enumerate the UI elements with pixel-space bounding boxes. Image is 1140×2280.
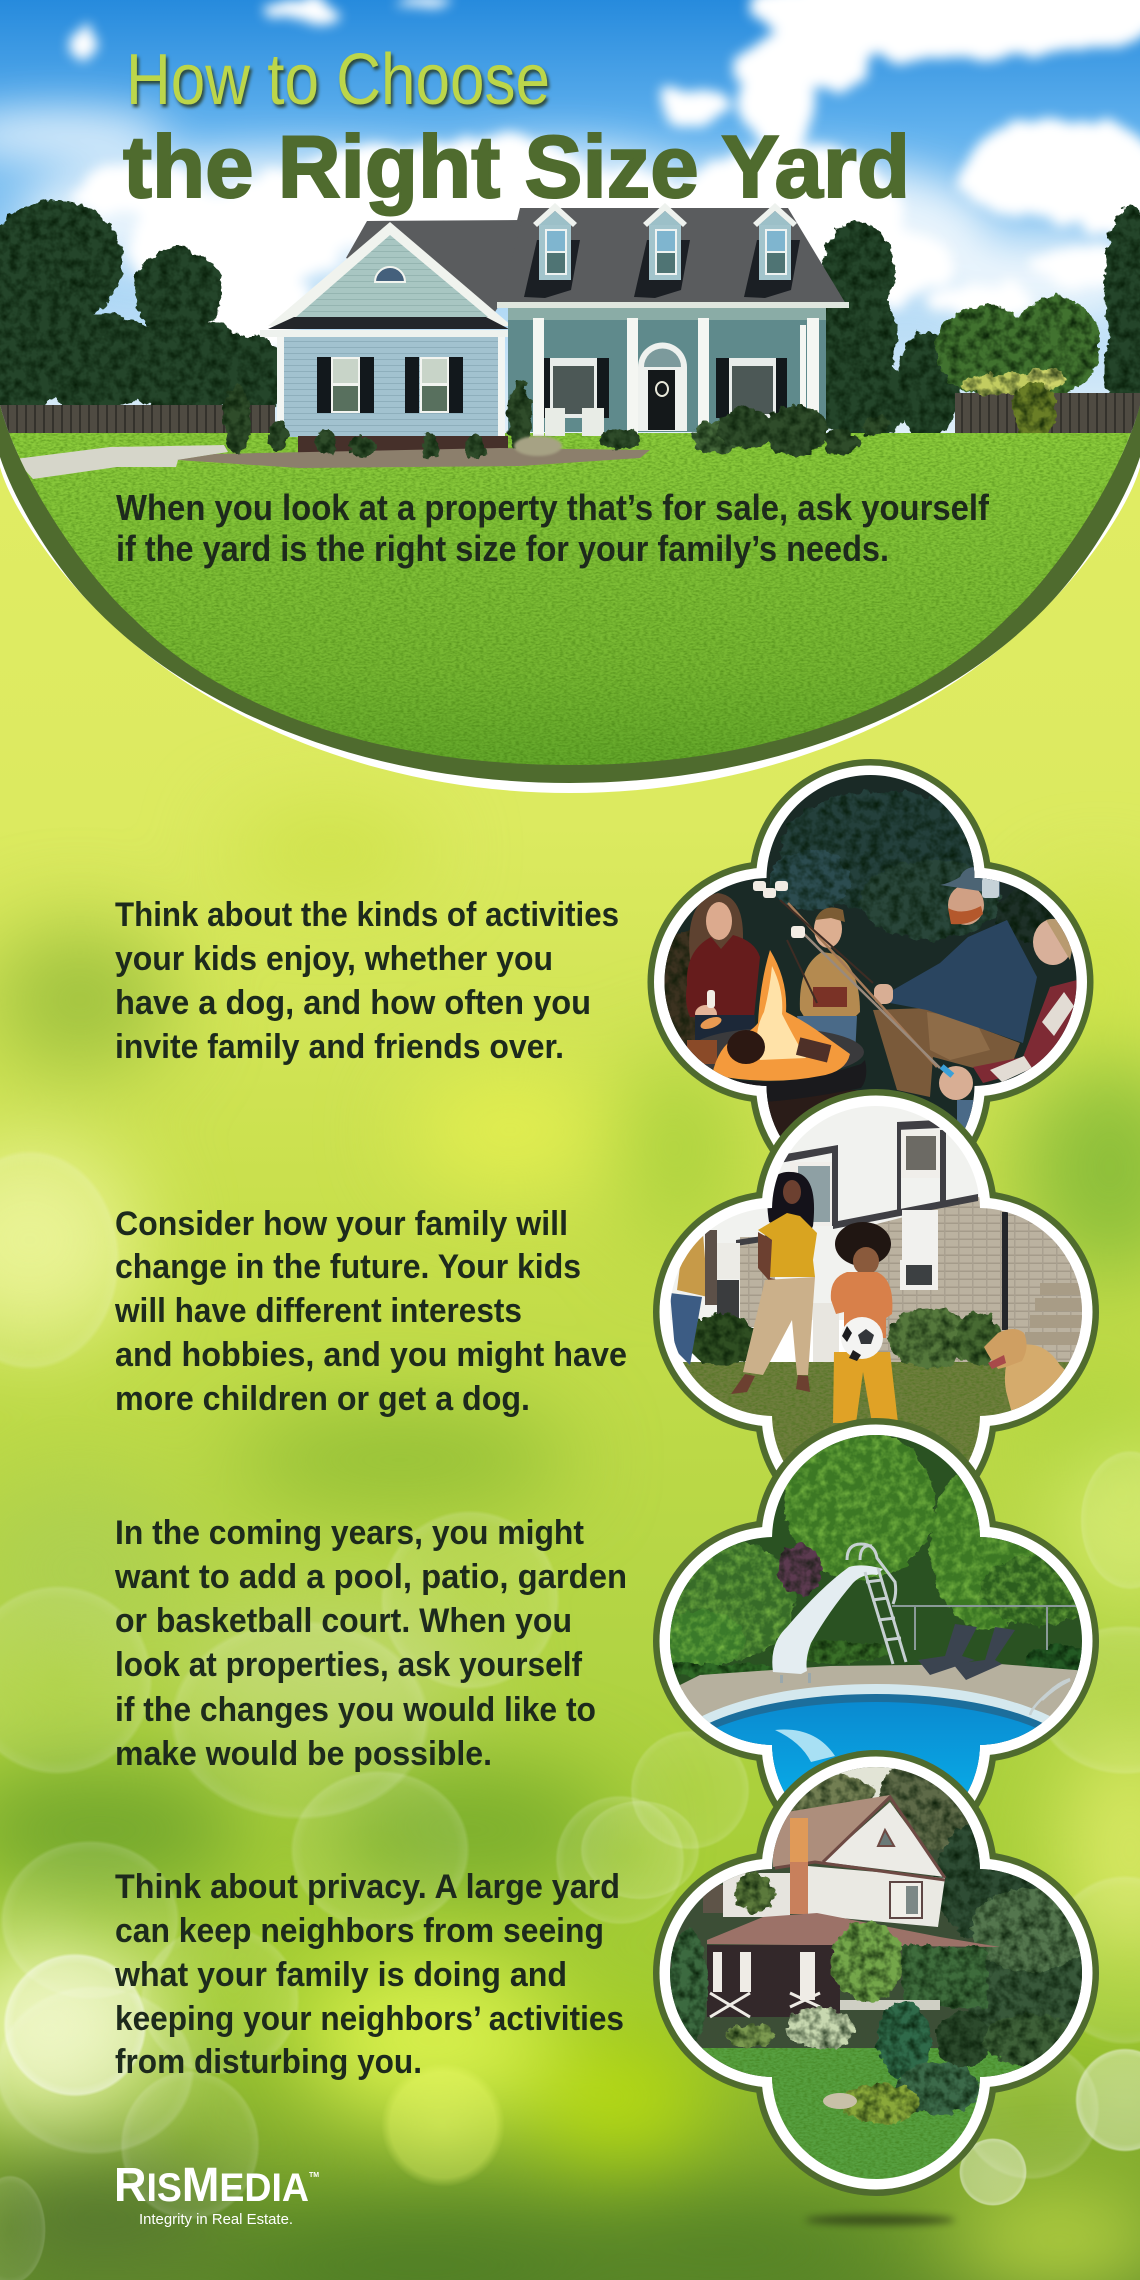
timber trim — [736, 1120, 978, 1246]
text block: privacy: from disturbing you. — [115, 2043, 422, 2081]
RISMedia logo: TM — [309, 2172, 319, 2179]
house roof and upper storey — [703, 1795, 945, 1927]
text block: privacy — [114, 1868, 624, 2081]
chain link fence — [892, 1606, 1080, 1650]
text block: future changes: more children or get a dog. — [115, 1380, 530, 1418]
golden retriever — [984, 1329, 1070, 1421]
wooden fences — [0, 393, 1140, 442]
woman in maroon sweater — [686, 893, 760, 1040]
text block: privacy: what your family is doing and — [114, 1956, 567, 1994]
hero panel: house photo in arched frame — [0, 0, 1140, 793]
seated boy in tan jacket — [797, 908, 860, 1056]
porch and roof — [707, 1913, 1000, 2017]
driveway — [15, 445, 228, 479]
white outer arch — [0, 0, 1140, 793]
text block: future changes — [114, 1205, 627, 1418]
dormer windows — [524, 203, 800, 298]
porch — [497, 302, 849, 436]
pool water — [661, 1684, 1091, 1842]
slide ladder — [847, 1544, 906, 1664]
front gable — [260, 222, 524, 337]
RISMedia logo: Integrity in Real Estate. — [139, 2211, 293, 2228]
text block: activities — [115, 896, 619, 1066]
soft ground shadow under last photo — [805, 2215, 955, 2225]
text block: additions: look at properties, ask yourself — [115, 1646, 583, 1684]
intro text: if the yard is the right size for your family’s needs. — [116, 528, 889, 569]
garden foliage — [655, 1430, 1100, 1670]
text block: additions: make would be possible. — [115, 1735, 492, 1773]
text block: additions: want to add a pool, patio, garden — [114, 1558, 627, 1596]
child with soccer ball — [831, 1222, 898, 1423]
house — [260, 203, 849, 454]
text block: future changes: will have different interests — [114, 1292, 522, 1330]
bokeh light circles — [0, 1150, 1140, 2280]
text block: additions: or basketball court. When you — [115, 1602, 572, 1640]
dark green arch band — [0, 0, 1140, 783]
text block: privacy: Think about privacy. A large yard — [115, 1868, 620, 1906]
boy in plaid shirt — [939, 919, 1085, 1130]
lawn — [0, 433, 1140, 773]
distant right trees — [935, 297, 1100, 394]
text block: privacy: keeping your neighbors’ activities — [115, 2000, 624, 2038]
brick wall — [873, 1197, 1090, 1365]
title: the Right Size Yard — [123, 117, 910, 216]
background trees — [0, 200, 1140, 440]
yellow hedge — [960, 368, 1065, 438]
text block: activities: Think about the kinds of activities — [115, 896, 619, 934]
lawn — [650, 2048, 1100, 2198]
text block: future changes: Consider how your family will — [115, 1205, 568, 1243]
text block: activities: your kids enjoy, whether you — [115, 940, 553, 978]
woman in yellow shirt — [731, 1172, 817, 1394]
shrubs and flower bed — [177, 381, 889, 468]
garden shrubs and trees — [669, 1922, 1078, 2123]
quatrefoil photo: family roasting marshmallows — [648, 759, 1094, 1152]
title — [123, 40, 910, 216]
house roof — [346, 208, 846, 320]
treetops behind house — [775, 1750, 1095, 2050]
man with cap — [873, 867, 1037, 1097]
text block: activities: have a dog, and how often you — [115, 984, 591, 1022]
text block: future changes: change in the future. Your kids — [115, 1248, 581, 1286]
text block: activities: invite family and friends over. — [115, 1028, 564, 1066]
water slide — [772, 1565, 883, 1683]
text block: additions: In the coming years, you might — [115, 1514, 584, 1552]
fire pit — [681, 950, 868, 1135]
hedges — [684, 1308, 1002, 1368]
intro text — [116, 487, 990, 569]
text block: future changes: and hobbies, and you might have — [115, 1336, 627, 1374]
left wing wall — [277, 337, 508, 454]
lounge chairs — [918, 1624, 1015, 1680]
marshmallow skewers — [707, 881, 940, 1068]
RISMedia logo: RISMEDIA — [114, 2159, 309, 2212]
text block: additions: if the changes you would like to — [115, 1691, 596, 1729]
house windows — [717, 1130, 940, 1290]
text block: additions — [114, 1514, 627, 1773]
pool deck — [650, 1664, 1100, 1800]
quatrefoil photo: family playing soccer in yard — [650, 1089, 1100, 1542]
downspout and stairs — [1002, 1212, 1100, 1345]
quatrefoil photo: house with private garden — [650, 1750, 1100, 2198]
pool handrails — [1030, 1679, 1070, 1715]
person at left edge — [670, 1230, 717, 1365]
title: How to Choose — [126, 40, 550, 120]
quatrefoil photo: pool with slide — [650, 1418, 1100, 1864]
text block: privacy: can keep neighbors from seeing — [115, 1912, 604, 1950]
intro text: When you look at a property that’s for sale, ask yourself — [116, 487, 990, 528]
